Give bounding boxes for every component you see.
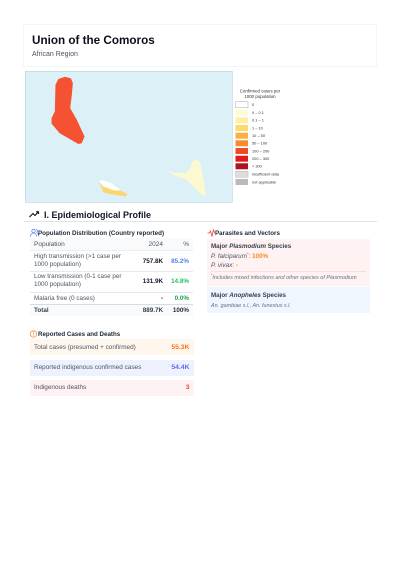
map legend: insufficient data xyxy=(252,172,280,177)
population table: 889.7K xyxy=(143,306,163,314)
island: Anjouan xyxy=(168,160,206,196)
parasites heading: Parasites and Vectors xyxy=(215,230,280,237)
panel: plasmodium species: P. falciparum*: 100% xyxy=(211,251,268,260)
population table: 1000 population) xyxy=(34,260,81,268)
population table: - xyxy=(161,294,163,302)
population table: Malaria free (0 cases) xyxy=(34,294,95,302)
stat: indigenous cases: Reported indigenous confirmed cases xyxy=(34,364,141,371)
map legend: 200 – 300 xyxy=(252,156,270,161)
population table: Low transmission (0-1 case per xyxy=(34,273,122,280)
map legend: Confirmed cases per xyxy=(240,88,281,94)
map legend: 0.1 – 1 xyxy=(252,118,264,123)
panel: plasmodium species: *Includes mixed infections and other species of Plasmodium xyxy=(211,273,357,280)
map legend: > 300 xyxy=(252,164,263,169)
population table: 1000 population) xyxy=(34,281,81,288)
panel: plasmodium species xyxy=(207,239,370,286)
stat: total cases: 55.3K xyxy=(171,344,190,350)
icon: trend xyxy=(30,212,38,217)
map legend: 1 – 10 xyxy=(252,125,264,130)
population table: 85.2% xyxy=(171,258,189,264)
section heading: I. Epidemiological Profile xyxy=(44,210,151,220)
population table: 757.8K xyxy=(143,258,163,264)
panel: anopheles species xyxy=(207,287,370,313)
reported cases heading: Reported Cases and Deaths xyxy=(38,331,120,338)
map legend: 1000 population xyxy=(244,94,276,99)
population heading: Population Distribution (Country reported) xyxy=(38,230,164,237)
header card xyxy=(23,24,377,67)
stat: indigenous cases xyxy=(30,360,194,376)
subtitle: African Region xyxy=(32,50,78,58)
population table: Total xyxy=(34,306,49,314)
stat: indigenous deaths: 3 xyxy=(186,384,190,391)
title: Union of the Comoros xyxy=(32,34,155,46)
map legend xyxy=(236,88,281,185)
island: Moheli xyxy=(99,180,128,196)
map legend: 10 – 50 xyxy=(252,133,266,138)
population table: High transmission (>1 case per xyxy=(34,252,121,260)
map legend: 0 – 0.1 xyxy=(252,110,264,115)
stat: indigenous deaths xyxy=(30,380,194,396)
population table: 0.0% xyxy=(175,294,189,302)
island: Grande Comore xyxy=(52,78,84,143)
map legend: 100 – 200 xyxy=(252,148,270,153)
icon: pulse xyxy=(208,230,215,236)
population table: 100% xyxy=(173,306,189,314)
population table: 2024 xyxy=(149,241,163,248)
population table: % xyxy=(183,241,189,248)
stat: total cases xyxy=(30,339,194,355)
population table xyxy=(30,241,193,314)
stat: indigenous cases: 54.4K xyxy=(171,364,190,371)
stat: indigenous deaths: Indigenous deaths xyxy=(34,384,86,391)
icon: warning circle xyxy=(30,331,37,337)
stat: total cases: Total cases (presumed + confirmed) xyxy=(34,344,136,350)
divider xyxy=(24,220,377,223)
map legend: 50 – 100 xyxy=(252,141,268,146)
panel: anopheles species: Major Anopheles Species xyxy=(211,292,286,298)
population table: Population xyxy=(34,241,65,248)
population table: 14.8% xyxy=(171,278,189,284)
panel: anopheles species: An. gambiae s.l., An. funestus s.l. xyxy=(211,302,291,308)
map legend: 0 xyxy=(252,102,255,107)
icon: people xyxy=(30,229,39,236)
panel: plasmodium species: Major Plasmodium Species xyxy=(211,243,291,250)
map legend: not applicable xyxy=(252,179,276,184)
population table: 131.9K xyxy=(143,278,163,284)
panel: plasmodium species: P. vivax: - xyxy=(211,262,238,268)
